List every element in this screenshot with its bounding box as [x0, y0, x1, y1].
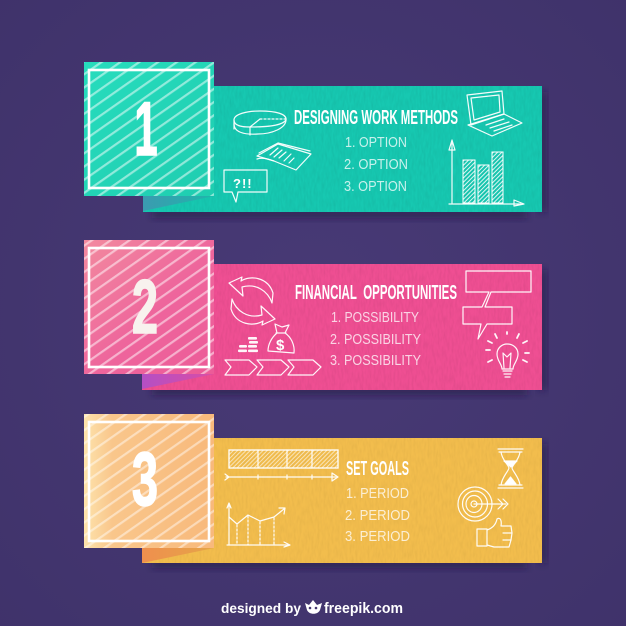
list: periods: 1. PERIOD	[346, 486, 409, 502]
icon: hourglass	[498, 449, 523, 488]
icon: speech bubbles	[463, 271, 531, 339]
list: periods: 3. PERIOD	[345, 529, 410, 545]
icon: money bag: $	[276, 337, 285, 354]
list: possibilities: 2. POSSIBILITY	[330, 332, 421, 348]
list: options: 1. OPTION	[345, 135, 407, 151]
icon: bar chart	[449, 140, 524, 206]
panel: step 3	[84, 414, 547, 568]
number square 3	[84, 414, 214, 548]
icon: speech bubble with ?!!: ?!!	[233, 176, 253, 191]
heading: set goals: SET GOALS	[346, 458, 409, 480]
icon: thumbs up	[477, 518, 512, 547]
banner 3	[142, 438, 547, 568]
list: periods	[345, 486, 410, 545]
icon: freepik logo	[305, 600, 322, 614]
icon: target with arrow	[458, 487, 508, 521]
list: periods: 2. PERIOD	[345, 508, 410, 524]
banner 1	[143, 86, 547, 218]
list: possibilities	[330, 310, 421, 369]
list: options: 3. OPTION	[344, 179, 407, 195]
list: possibilities: 1. POSSIBILITY	[331, 310, 419, 326]
icon: process arrows	[225, 360, 321, 375]
panel: step 1	[84, 62, 547, 218]
number square 1	[84, 62, 214, 196]
footer credit: designed by	[221, 600, 301, 616]
heading: financial opportunities: FINANCIAL OPPORTUNITIES	[295, 282, 457, 304]
number square 1: 1	[134, 86, 158, 171]
footer credit	[221, 600, 403, 617]
number square 3: 3	[132, 438, 158, 522]
icon: light bulb	[486, 332, 529, 377]
icon: pie chart	[234, 111, 286, 135]
icon: coins	[238, 337, 258, 352]
heading: designing work methods: DESIGNING WORK METHODS	[294, 107, 458, 129]
list: options	[344, 135, 408, 195]
banner 2	[142, 264, 547, 395]
icon: open book	[257, 143, 311, 170]
icon: recycle arrows	[229, 277, 275, 325]
icon: line chart	[227, 503, 290, 547]
footer credit: freepik.com	[324, 601, 403, 617]
list: options: 2. OPTION	[344, 157, 408, 173]
icon: progress bar	[225, 450, 338, 481]
list: possibilities: 3. POSSIBILITY	[330, 353, 421, 369]
icon: speech bubble with ?!!	[224, 170, 267, 202]
panel: step 2	[84, 240, 547, 395]
number square 2: 2	[132, 266, 158, 350]
number square 2	[84, 240, 214, 374]
icon: laptop	[467, 91, 522, 136]
icon: money bag	[268, 324, 294, 354]
